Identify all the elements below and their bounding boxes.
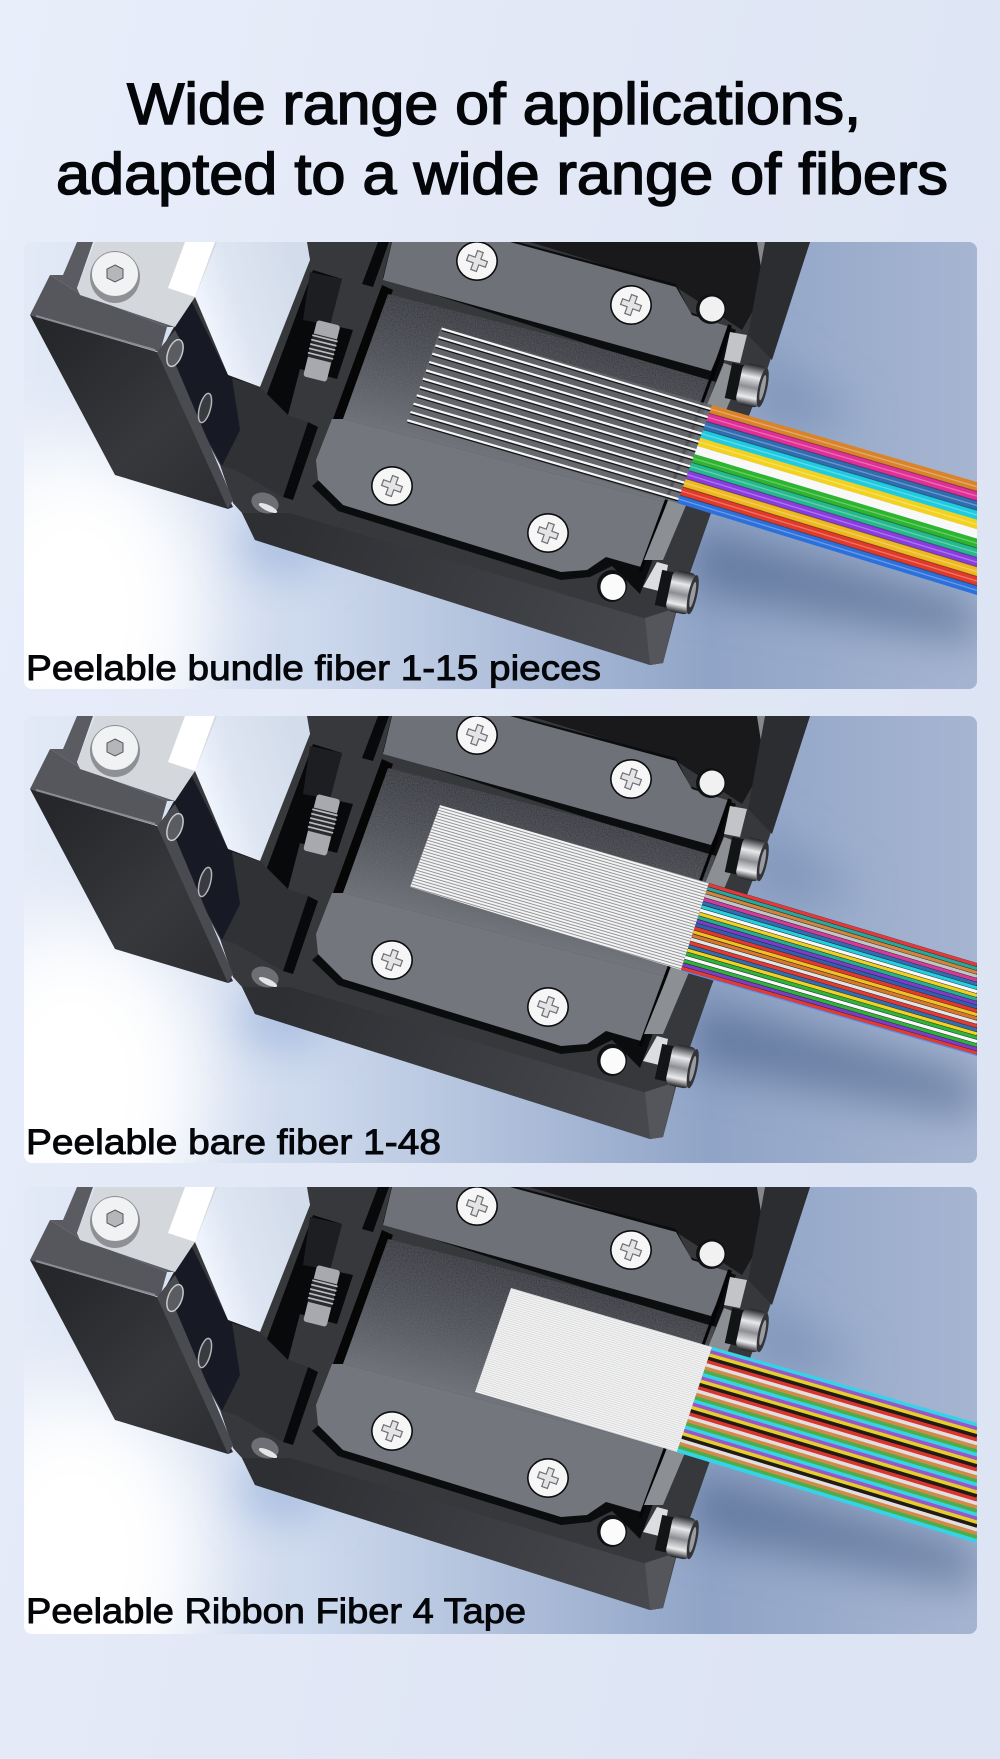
panel: peelable bare fiber xyxy=(24,716,977,1163)
title: adapted to a wide range of fibers xyxy=(56,142,948,207)
coloured fiber ribbon, 12 bands xyxy=(677,405,977,595)
panel background xyxy=(24,1187,977,1634)
stripper device xyxy=(30,240,810,665)
title: Wide range of applications, xyxy=(127,72,861,137)
stripped white ribbon sheet xyxy=(475,1288,712,1452)
title xyxy=(56,72,948,207)
panel background xyxy=(24,716,977,1163)
stripper device xyxy=(30,1185,810,1610)
caption: Peelable bundle fiber 1-15 pieces xyxy=(26,649,601,688)
panel: peelable ribbon fiber xyxy=(24,1187,977,1634)
caption: Peelable Ribbon Fiber 4 Tape xyxy=(26,1592,526,1631)
stripped white fibers, 12 strands xyxy=(407,327,712,503)
coloured fiber bundle, 24 strands xyxy=(681,883,977,1056)
stripper device xyxy=(30,714,810,1139)
coloured ribbon fibers, 4 tapes xyxy=(677,1349,977,1541)
stripped white fiber sheet xyxy=(410,805,709,970)
caption: Peelable bare fiber 1-48 xyxy=(26,1123,441,1162)
panel: peelable bundle fiber xyxy=(24,242,977,689)
panel background xyxy=(24,242,977,689)
